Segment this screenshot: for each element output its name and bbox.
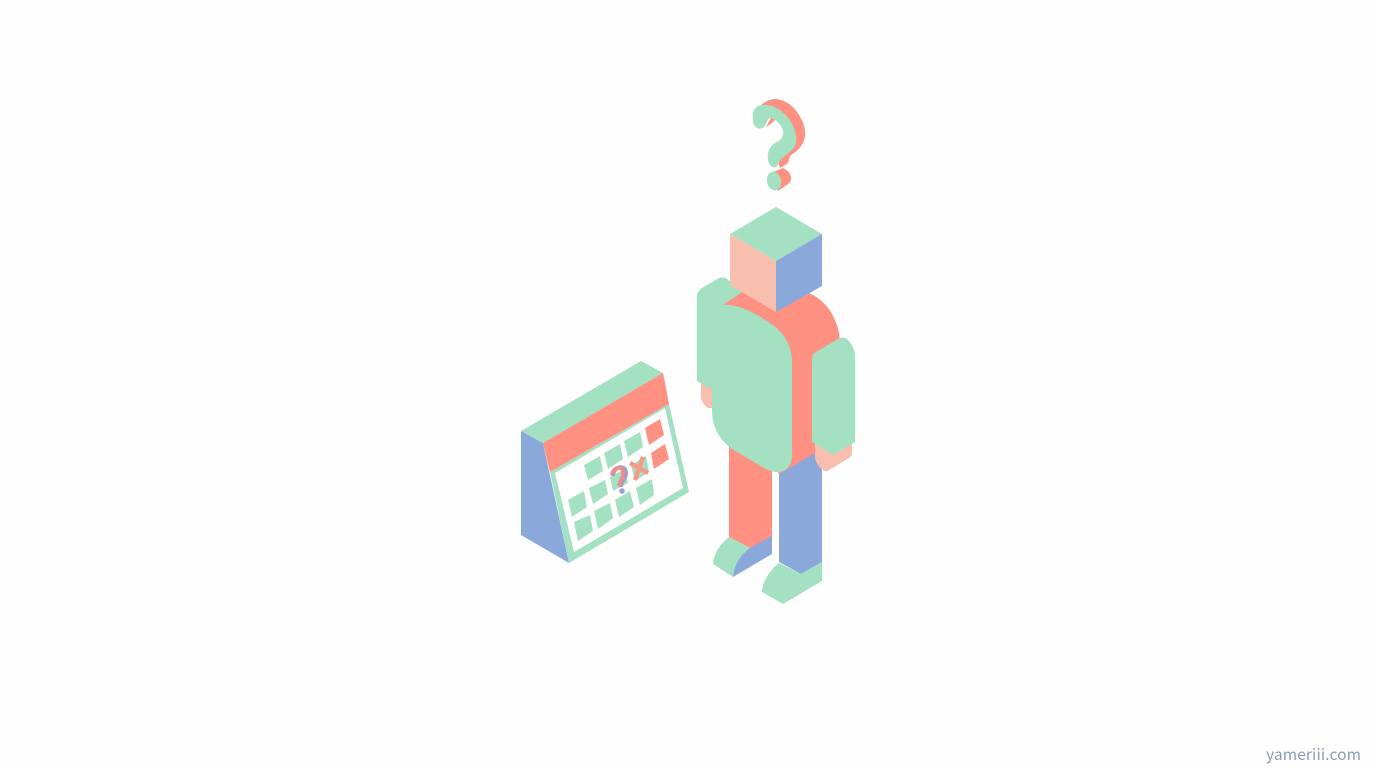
calendar day cells: [568, 432, 654, 541]
icon: question mark on calendar: [612, 467, 626, 494]
right shoe: [762, 562, 822, 604]
right hand: [815, 440, 852, 471]
torso front: [712, 305, 792, 472]
calendar side: [521, 431, 569, 563]
head: [730, 207, 822, 312]
figure: isometric person: [697, 207, 855, 604]
left hand: [701, 378, 714, 408]
calendar marked days: [645, 419, 669, 469]
right leg: [779, 450, 822, 574]
icon: floating question mark: [753, 99, 805, 192]
calendar top: [521, 361, 663, 443]
watermark: yameriii.com: [1266, 743, 1361, 765]
right arm: [812, 338, 855, 455]
left shoe: [713, 536, 772, 577]
calendar page frame: [550, 404, 689, 563]
torso back: [723, 290, 840, 474]
left leg: [729, 440, 772, 548]
icon: desk calendar: [521, 361, 689, 563]
icon: red cross on calendar: [630, 457, 648, 480]
left arm: [697, 277, 745, 400]
calendar page: [555, 408, 683, 552]
calendar header: [543, 373, 669, 472]
